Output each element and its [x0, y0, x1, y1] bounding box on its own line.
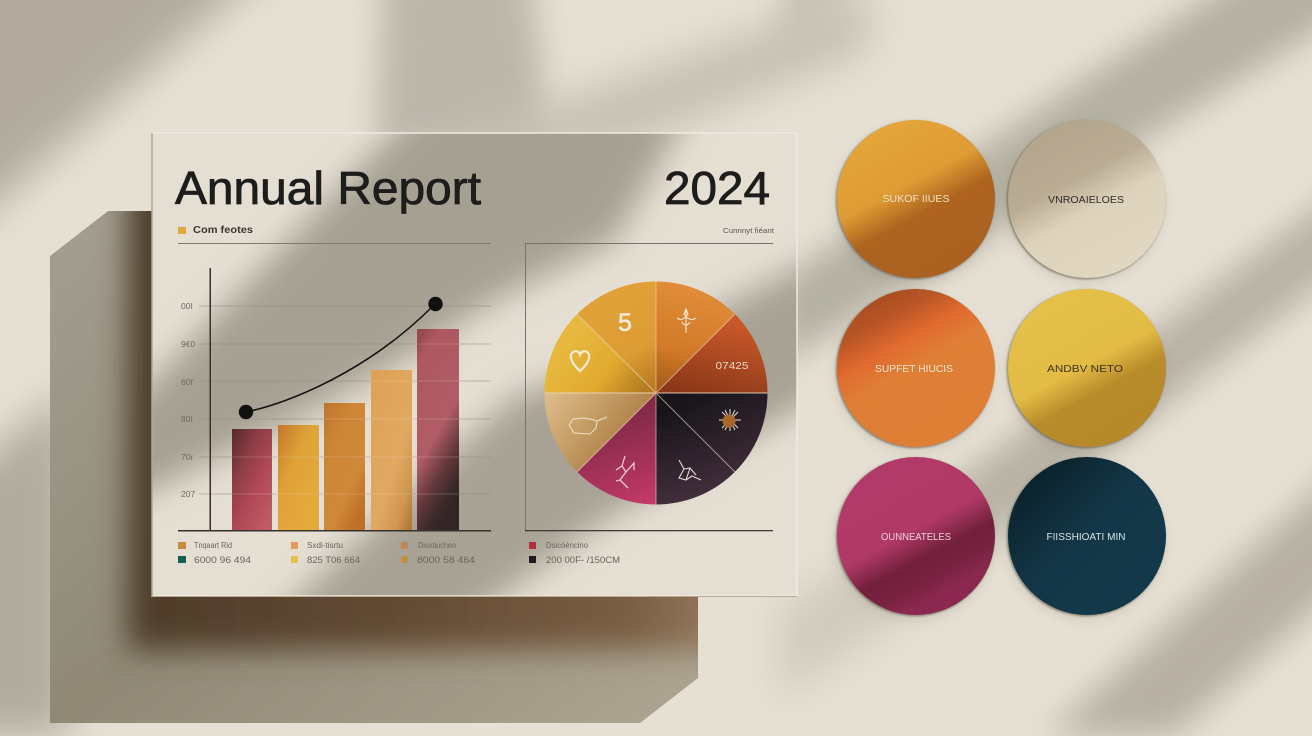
left section heading [178, 225, 491, 244]
bar 2 [278, 425, 319, 530]
bar chart legend: 6000 96 494 [194, 555, 251, 565]
y axis labels: 00I [181, 301, 193, 311]
bar chart [178, 268, 491, 532]
y axis labels: 70r [181, 452, 193, 462]
swatch circle: orange: SUPFET HIUCIS [875, 363, 953, 375]
swatch circle: sand: VNROAIELOES [1048, 194, 1124, 206]
segment: black sun [656, 393, 768, 472]
right section caption: Cunnnyt fiéant [723, 226, 775, 235]
pie chart legend [529, 541, 620, 565]
bar chart legend: Dioxtiuchen [418, 541, 456, 550]
swatch circle: sand [1006, 120, 1166, 283]
y axis labels: 9€0 [181, 339, 195, 349]
segment dividers [544, 280, 768, 505]
segment: magenta [577, 393, 656, 515]
title: Annual Report [175, 162, 481, 214]
y axis labels: 80I [181, 414, 193, 424]
swatch circle: magenta: OUNNEATELES [881, 531, 951, 543]
pie label: number: 07425 [716, 360, 749, 372]
bar 3 [324, 403, 365, 530]
segment: orange [656, 270, 735, 393]
pie chart legend: Dsicóéncino [546, 541, 589, 550]
year: 2024 [664, 162, 770, 214]
swatch circle: amber [835, 120, 995, 283]
axes [178, 268, 491, 532]
y axis labels [181, 301, 195, 499]
swatch circle: magenta [835, 457, 995, 620]
icon: ornament cross [677, 309, 696, 333]
trend line [239, 297, 443, 419]
bar chart legend: 825 T06 664 [307, 555, 360, 565]
pie chart frame [525, 243, 773, 531]
bar chart legend: Sxdi-tisrtu [307, 541, 343, 550]
swatch circle: yellow [1006, 289, 1166, 452]
y axis labels: 207 [181, 489, 195, 499]
bar 1 [232, 429, 272, 530]
left section heading: Com feotes [193, 225, 253, 236]
icon: sun [719, 409, 741, 431]
bar grid highlights [232, 344, 459, 494]
bar chart legend: Tnqaart Rid [194, 541, 232, 550]
swatch circle: deep teal [1006, 457, 1166, 620]
segment: black figure [656, 393, 735, 515]
pie chart legend: 200 00F- /150CM [546, 555, 620, 565]
segment: amber number [577, 270, 656, 393]
bar chart legend: 8000 58 464 [417, 555, 475, 565]
icon: figure [616, 456, 634, 488]
swatch circle: deep teal: FIISSHIOATI MIN [1046, 531, 1126, 543]
segment: gold heart [544, 314, 656, 393]
icon: hand-drawn animal [569, 417, 607, 434]
bar chart legend [178, 541, 475, 565]
segment: tan [544, 393, 656, 472]
icon: heart [571, 351, 589, 371]
chart grid lines [199, 306, 491, 494]
card drop shadow [50, 211, 698, 723]
swatch circle: amber: SUKOF IIUES [882, 193, 950, 205]
report card [151, 132, 798, 597]
pie label: 5: 5 [618, 309, 632, 337]
bar 5 [417, 329, 459, 530]
swatch circle: yellow: ANDBV NETO [1047, 363, 1123, 375]
pie chart [544, 282, 768, 504]
segment: rust [656, 314, 768, 393]
bar 4 [371, 370, 412, 530]
swatch circle: orange [835, 289, 995, 452]
icon: creature [679, 460, 701, 480]
y axis labels: 60f [181, 377, 193, 387]
